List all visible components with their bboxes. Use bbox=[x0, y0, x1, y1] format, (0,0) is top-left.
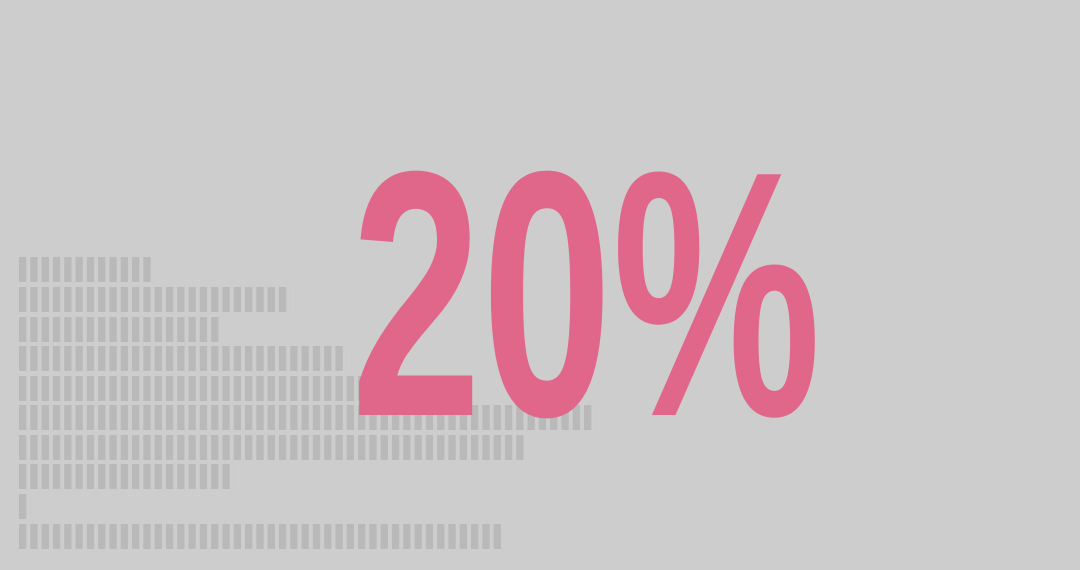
headline: 20%: 20% bbox=[351, 99, 821, 490]
bar chart: rows of small bars bbox=[19, 257, 595, 549]
